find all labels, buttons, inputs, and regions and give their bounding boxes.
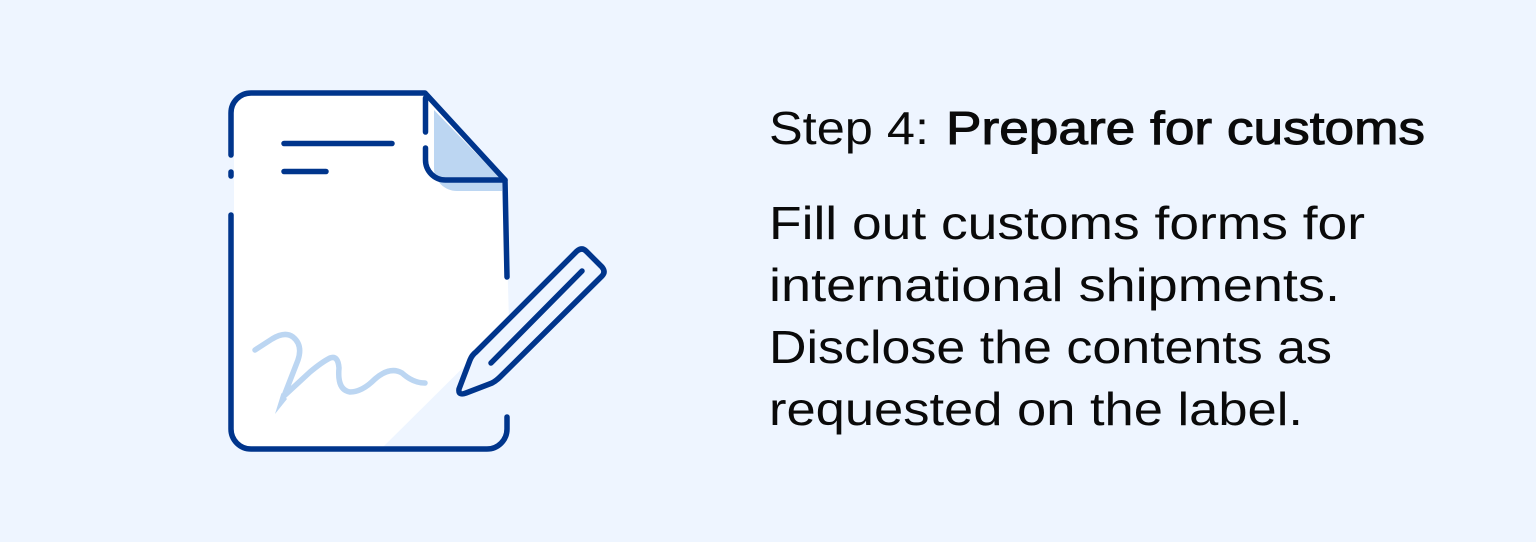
- body text: requested on the label.: [769, 383, 1303, 435]
- folded corner: [426, 98, 505, 191]
- signature taper: [275, 393, 287, 414]
- body text: international shipments.: [769, 259, 1340, 311]
- heading bold part: Prepare for customs: [946, 102, 1425, 154]
- icon: pencil: [459, 249, 604, 394]
- text lines on document: [284, 144, 392, 172]
- document sheet fill: [234, 95, 509, 447]
- body text: Disclose the contents as: [769, 321, 1332, 373]
- document outline: [231, 93, 507, 449]
- body text: Fill out customs forms for: [769, 197, 1365, 249]
- heading: Step 4:: [769, 102, 929, 154]
- body text: [769, 197, 1365, 435]
- icon: document with signature and pencil: [231, 93, 604, 449]
- signature scribble: [255, 334, 425, 396]
